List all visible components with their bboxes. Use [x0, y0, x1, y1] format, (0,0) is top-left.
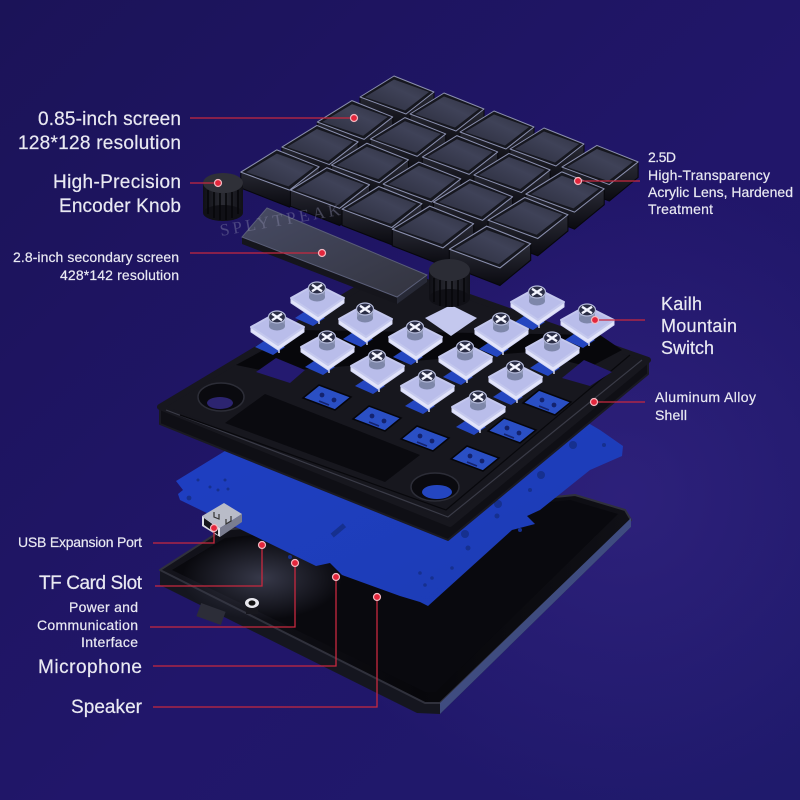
label: encoder knob — [53, 172, 181, 217]
label: acrylic lens: Acrylic Lens, Hardened — [648, 184, 793, 200]
label: acrylic lens: Treatment — [648, 201, 713, 217]
label: kailh switch — [661, 294, 737, 358]
label: aluminum shell: Shell — [655, 407, 687, 423]
label: encoder knob: High-Precision — [53, 172, 181, 193]
watermark: SPLYTPEAK — [218, 200, 343, 240]
encoder knob center — [429, 259, 470, 307]
icon: headphone jack — [245, 598, 259, 614]
label: power interface: Communication — [37, 617, 138, 633]
switch under knob — [425, 305, 477, 336]
label: 0.85-inch screen: 0.85-inch screen — [38, 109, 181, 130]
secondary screen — [242, 208, 427, 304]
screw hole right — [411, 473, 459, 501]
label: power interface: Power and — [69, 599, 138, 615]
label: power interface — [37, 599, 138, 650]
label: TF card slot: TF Card Slot — [39, 573, 143, 594]
port cutout — [196, 603, 226, 625]
keycaps with screens — [241, 76, 638, 286]
USB connector — [202, 503, 242, 537]
label: kailh switch: Kailh — [661, 294, 702, 314]
screw hole left — [198, 383, 244, 411]
secondary screen opening — [225, 394, 420, 482]
switch windows — [303, 385, 571, 471]
label: acrylic lens: High-Transparency — [648, 167, 770, 183]
label: kailh switch: Switch — [661, 338, 714, 358]
leader lines and dots — [150, 118, 645, 707]
large opening — [236, 330, 622, 372]
label: encoder knob: Encoder Knob — [59, 196, 181, 217]
label: kailh switch: Mountain — [661, 316, 737, 336]
label: USB port: USB Expansion Port — [18, 534, 142, 550]
bottom case — [160, 495, 631, 714]
label: secondary screen: 428*142 resolution — [60, 267, 179, 283]
aluminum alloy shell — [160, 269, 648, 540]
label: acrylic lens: 2.5D — [648, 149, 676, 165]
label: 0.85-inch screen: 128*128 resolution — [18, 133, 181, 154]
label: power interface: Interface — [81, 634, 138, 650]
label: secondary screen: 2.8-inch secondary screen — [13, 249, 179, 265]
label: 0.85-inch screen — [18, 109, 181, 154]
label: microphone: Microphone — [38, 657, 142, 678]
label: speaker: Speaker — [71, 697, 143, 718]
mechanical switches — [251, 282, 614, 435]
label: aluminum shell — [655, 389, 756, 423]
circuit board — [176, 380, 623, 606]
label: aluminum shell: Aluminum Alloy — [655, 389, 756, 405]
label: secondary screen — [13, 249, 179, 283]
encoder knob left — [203, 173, 243, 221]
label: acrylic lens — [648, 149, 793, 217]
